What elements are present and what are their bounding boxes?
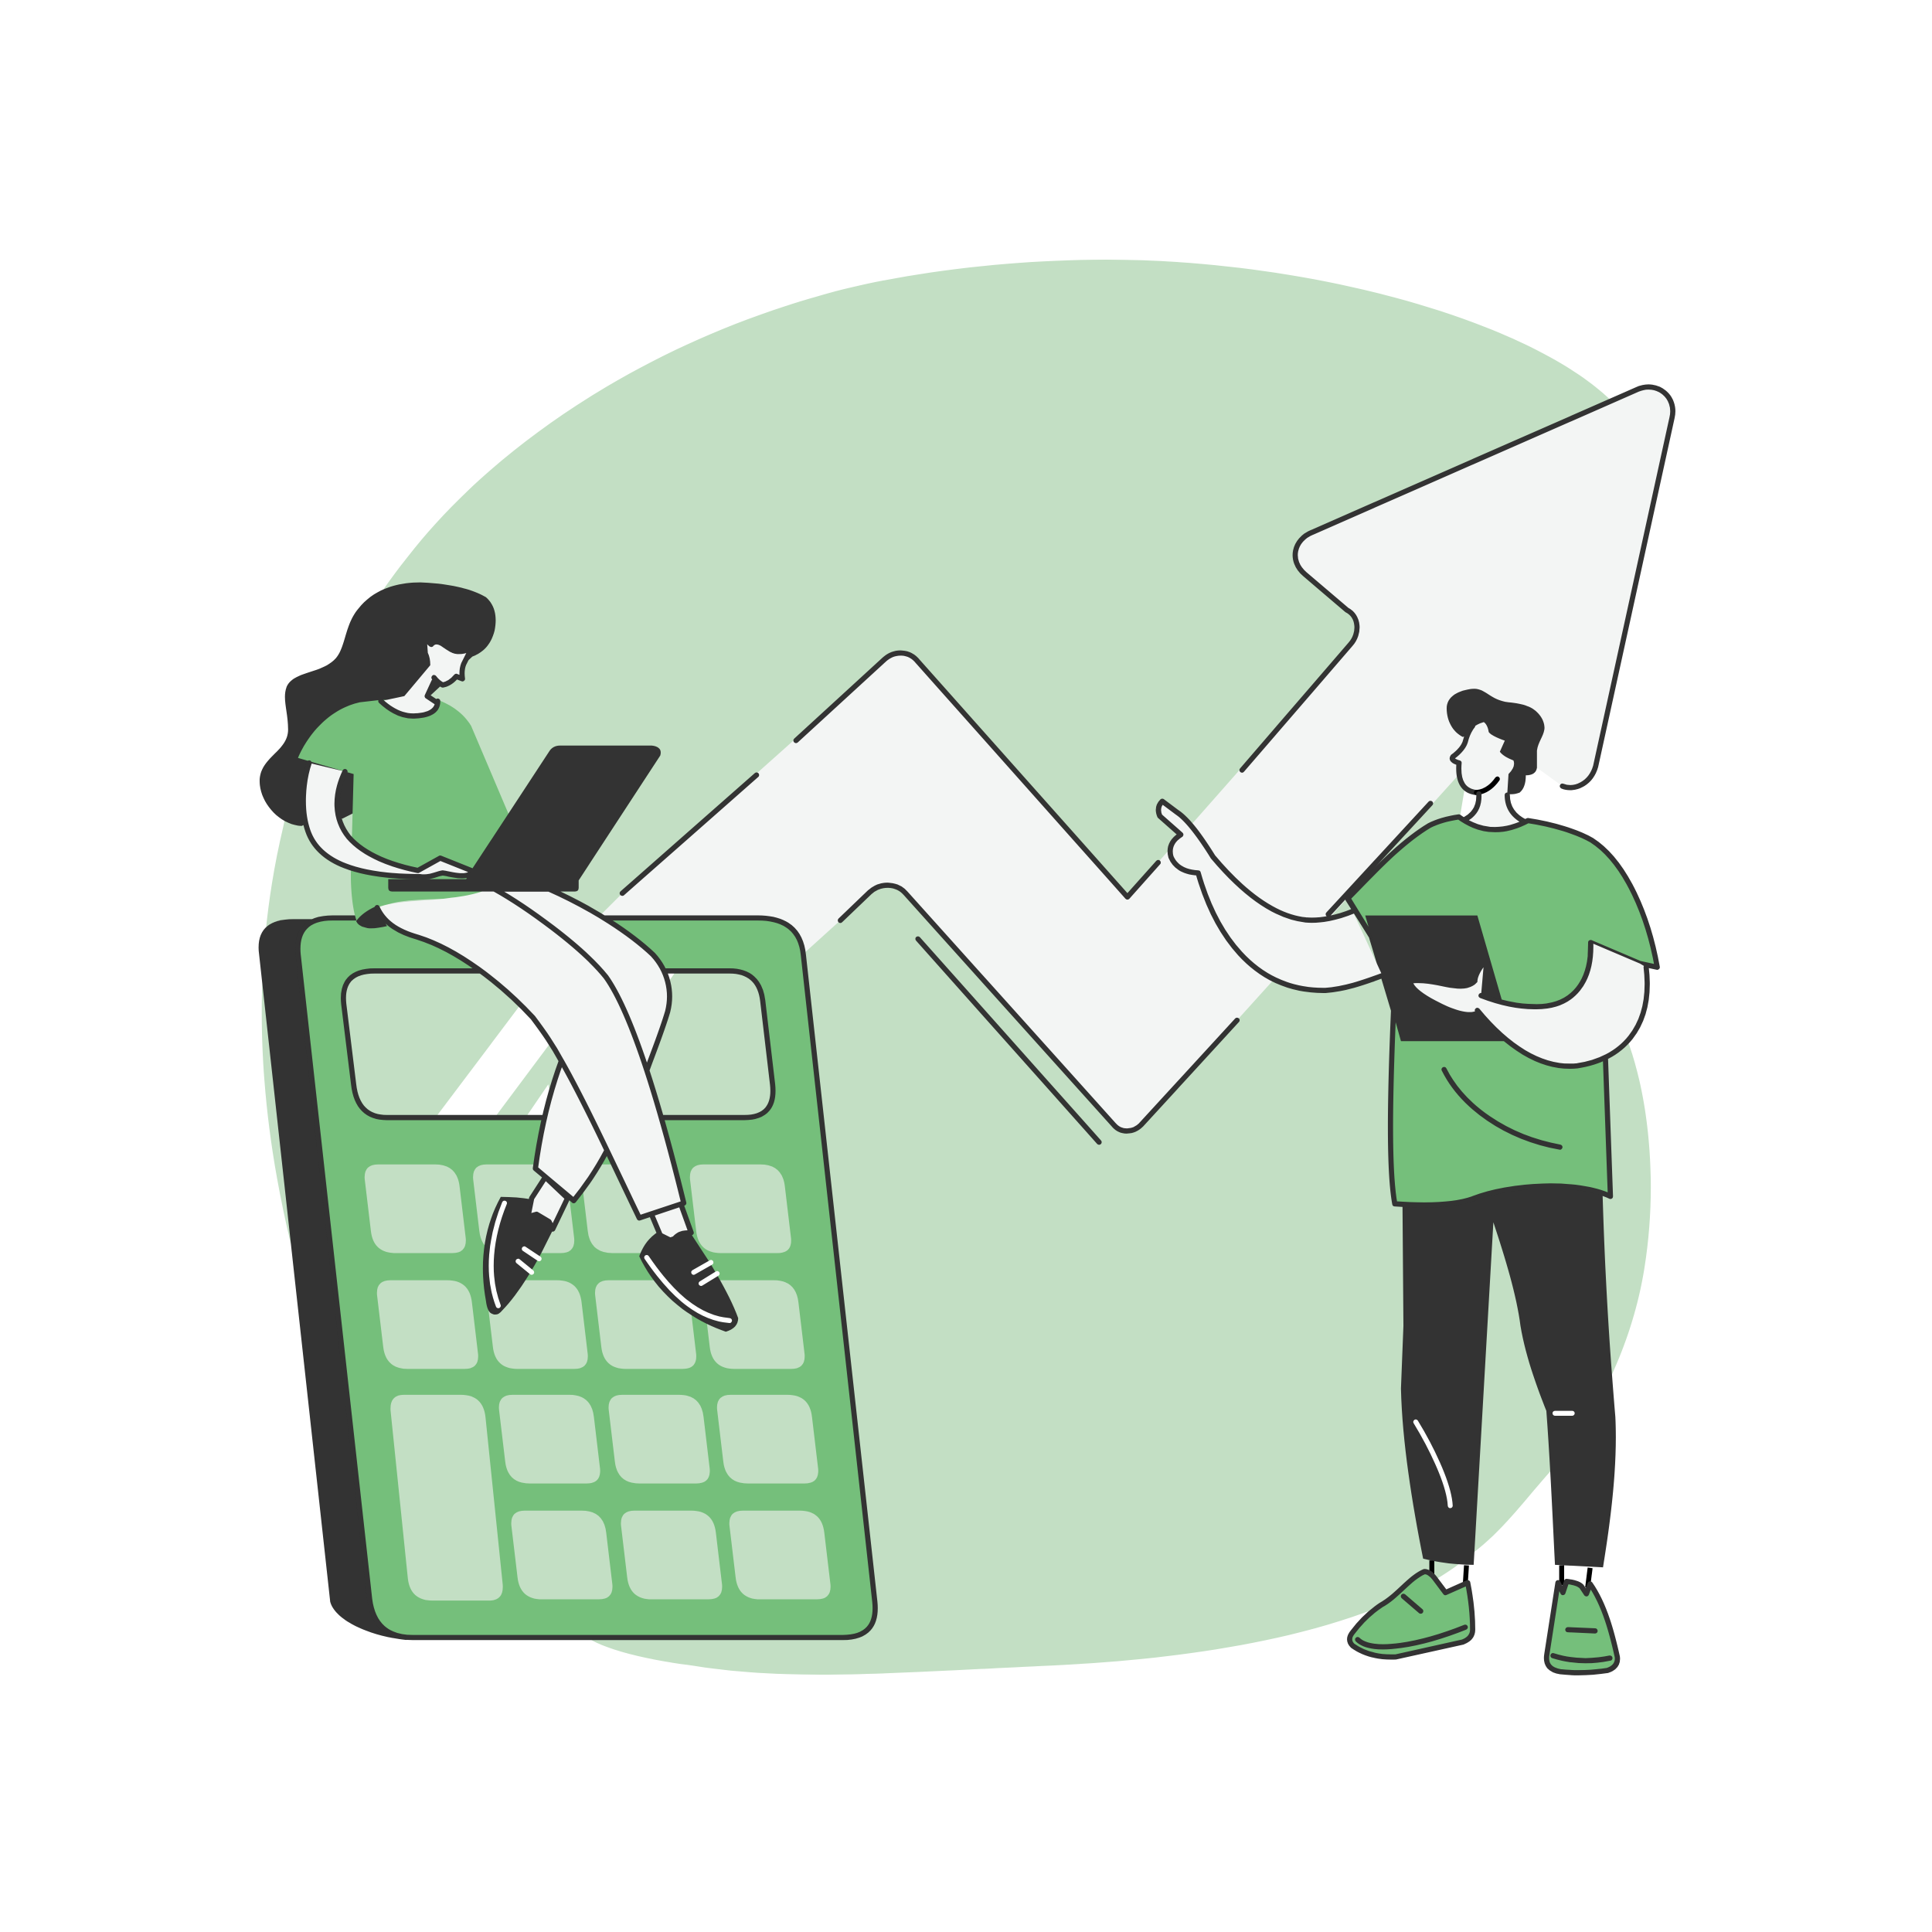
man right arm — [1413, 943, 1647, 1066]
woman arm — [303, 763, 471, 877]
man face and neck — [1451, 722, 1527, 833]
tablet — [1366, 916, 1522, 1041]
woman right shoe and ankle — [639, 1202, 738, 1332]
arrow outline — [622, 387, 1673, 1142]
calculator keys — [365, 1165, 831, 1600]
calculator — [259, 918, 875, 1640]
man shirt — [1348, 817, 1657, 1205]
man left arm — [1158, 801, 1383, 991]
man trousers — [1401, 1165, 1616, 1567]
woman face and neck — [381, 645, 470, 716]
man left shoe — [1349, 1572, 1473, 1657]
calculator screen — [343, 971, 773, 1117]
calculator side shadow — [259, 919, 406, 1640]
arrow fill — [579, 387, 1673, 1131]
woman hair — [260, 583, 495, 826]
man hair — [1447, 689, 1545, 794]
man right shoe — [1546, 1581, 1617, 1672]
woman front leg — [377, 886, 684, 1218]
man socks — [1432, 1560, 1590, 1587]
woman skirt shadow — [356, 906, 387, 928]
man standing with tablet — [1158, 689, 1657, 1672]
background blob — [262, 260, 1651, 1675]
woman shirt — [298, 700, 509, 925]
woman back leg — [495, 889, 669, 1201]
trouser highlights — [1416, 1413, 1572, 1505]
sleeve edge — [1348, 899, 1371, 936]
laptop — [388, 746, 661, 892]
calculator body — [298, 918, 875, 1638]
shirt fold — [1444, 1070, 1560, 1147]
rising arrow — [579, 387, 1673, 1142]
woman left shoe and ankle — [483, 1177, 567, 1315]
woman sitting with laptop — [260, 583, 738, 1332]
